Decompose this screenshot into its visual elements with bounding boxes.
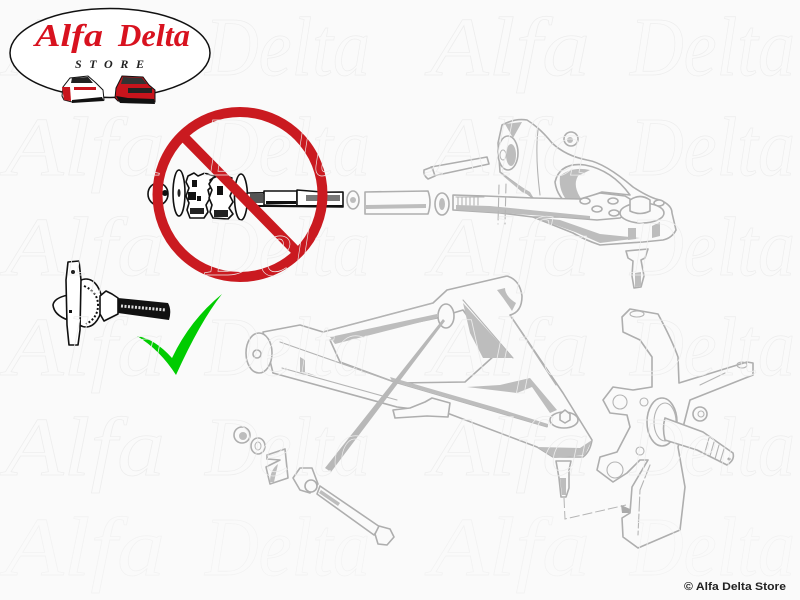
ball joint in black <box>53 261 170 345</box>
arm opening <box>555 165 630 207</box>
lower control arm assembly <box>234 276 630 545</box>
washer right <box>234 174 248 220</box>
threaded stud <box>118 298 170 320</box>
watermark pattern: Alfa <box>0 301 165 394</box>
watermark pattern: Delta <box>204 501 370 594</box>
long bolt <box>431 157 489 176</box>
washer <box>251 438 265 454</box>
watermark pattern: Alfa <box>424 1 590 94</box>
cross shaft with plate <box>453 193 640 220</box>
green check mark <box>137 294 222 375</box>
logo <box>10 8 210 104</box>
top eye <box>630 311 644 317</box>
ball seat <box>550 412 578 428</box>
watermark pattern: Alfa <box>0 201 165 294</box>
plate bolts <box>580 198 590 204</box>
pointer line <box>325 319 445 472</box>
arrow head on dashed line <box>621 505 630 513</box>
spindle shaft <box>664 418 733 465</box>
gear bushing two <box>209 175 233 219</box>
collar <box>100 291 118 321</box>
upper arm grey underside <box>533 217 640 243</box>
watermark pattern: Alfa <box>0 501 165 594</box>
arm ribs <box>280 300 556 427</box>
watermark pattern: Alfa <box>424 301 590 394</box>
copyright note: © Alfa Delta Store <box>684 581 786 593</box>
watermark pattern: Alfa <box>424 101 590 194</box>
ring <box>158 112 322 277</box>
white and red car <box>62 76 104 103</box>
nut right <box>435 193 449 215</box>
watermark pattern: Alfa <box>424 201 590 294</box>
left lugs <box>613 395 627 409</box>
threaded shaft <box>247 192 343 207</box>
dashed assembly line <box>564 498 626 519</box>
spindle flange <box>647 398 677 446</box>
logo oval <box>10 8 210 98</box>
left bushing <box>246 333 272 373</box>
small nut <box>234 427 250 443</box>
triangle opening <box>330 310 495 383</box>
washer left <box>173 170 185 216</box>
prohibited spring bushing stack <box>148 170 343 220</box>
clip <box>266 449 288 484</box>
gear bushing one <box>186 173 216 218</box>
eye bushing <box>438 304 454 328</box>
boot <box>70 279 102 327</box>
knuckle body <box>597 309 753 548</box>
watermark pattern: Alfa <box>424 501 590 594</box>
nut <box>148 183 168 205</box>
bracket web <box>500 130 540 198</box>
watermark pattern: Alfa <box>0 101 165 194</box>
dashed guide <box>498 184 506 224</box>
slash <box>185 138 296 251</box>
king bolt <box>620 203 664 223</box>
watermark pattern: Delta <box>204 201 370 294</box>
logo: Delta <box>117 17 190 53</box>
steering arm eye <box>737 362 747 368</box>
watermark pattern: Alfa <box>0 1 165 94</box>
ball stud <box>626 249 648 288</box>
inner contour <box>638 465 650 535</box>
lower arm body <box>263 276 592 457</box>
logo store text: STORE <box>75 57 149 71</box>
bolt <box>317 486 380 535</box>
bushing eye <box>498 136 518 170</box>
upper control arm assembly <box>347 120 676 288</box>
bushing <box>293 468 318 493</box>
top nut <box>564 132 578 146</box>
ball stud <box>556 461 571 497</box>
steering knuckle <box>597 309 753 548</box>
dome <box>53 295 68 320</box>
logo wordmark: Alfa <box>33 17 103 53</box>
red car <box>115 76 155 104</box>
flange <box>66 261 81 345</box>
side stud <box>393 398 450 418</box>
nut left <box>347 191 359 209</box>
watermark pattern: Alfa <box>424 401 590 494</box>
watermark pattern: Delta <box>204 301 370 394</box>
watermark pattern: Delta <box>204 1 370 94</box>
watermark pattern: Alfa <box>0 401 165 494</box>
spacer sleeve <box>365 191 430 214</box>
watermark pattern: Delta <box>204 101 370 194</box>
upper arm body <box>498 120 676 245</box>
prohibition sign <box>158 112 322 277</box>
watermark pattern: Delta <box>204 401 370 494</box>
